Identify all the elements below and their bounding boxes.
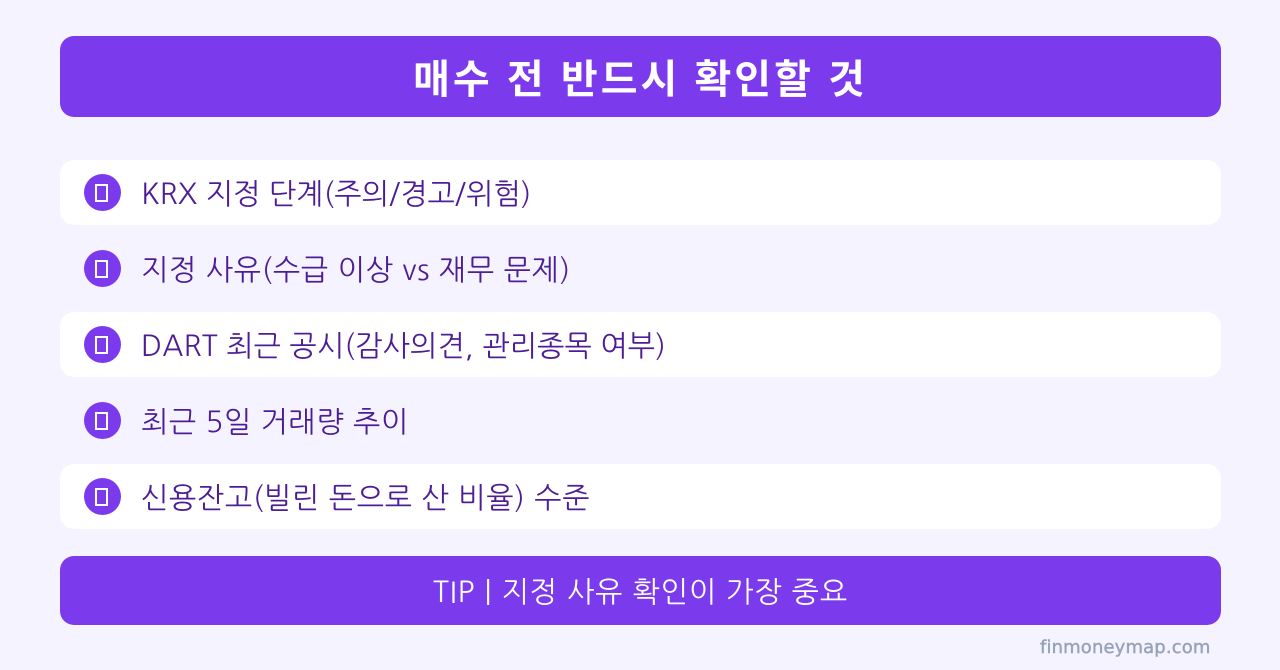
row text 2: 지정 사유(수급 이상 vs 재무 문제)	[141, 256, 571, 285]
row text 4: 최근 5일 거래량 추이	[141, 408, 409, 437]
icon: check badge 1	[84, 174, 121, 211]
icon: check badge 2	[84, 250, 121, 287]
footer site credit: finmoneymap.com	[1040, 637, 1211, 658]
tip banner	[60, 556, 1221, 625]
checklist row: KRX designation level	[60, 160, 1221, 225]
icon: check badge 5	[84, 478, 121, 515]
title banner: 매수 전 반드시 확인할 것	[413, 47, 868, 105]
icon: check badge 4	[84, 402, 121, 439]
tip banner: TIP | 지정 사유 확인이 가장 중요	[433, 578, 848, 607]
row text 3: DART 최근 공시(감사의견, 관리종목 여부)	[141, 332, 666, 361]
title banner	[60, 36, 1221, 117]
checklist row: designation reason	[84, 250, 571, 287]
row text 5: 신용잔고(빌린 돈으로 산 비율) 수준	[141, 484, 590, 513]
checklist row: margin balance	[60, 464, 1221, 529]
checklist row: trading volume	[84, 402, 409, 439]
row text 1: KRX 지정 단계(주의/경고/위험)	[141, 180, 531, 209]
checklist row: DART disclosures	[60, 312, 1221, 377]
icon: check badge 3	[84, 326, 121, 363]
